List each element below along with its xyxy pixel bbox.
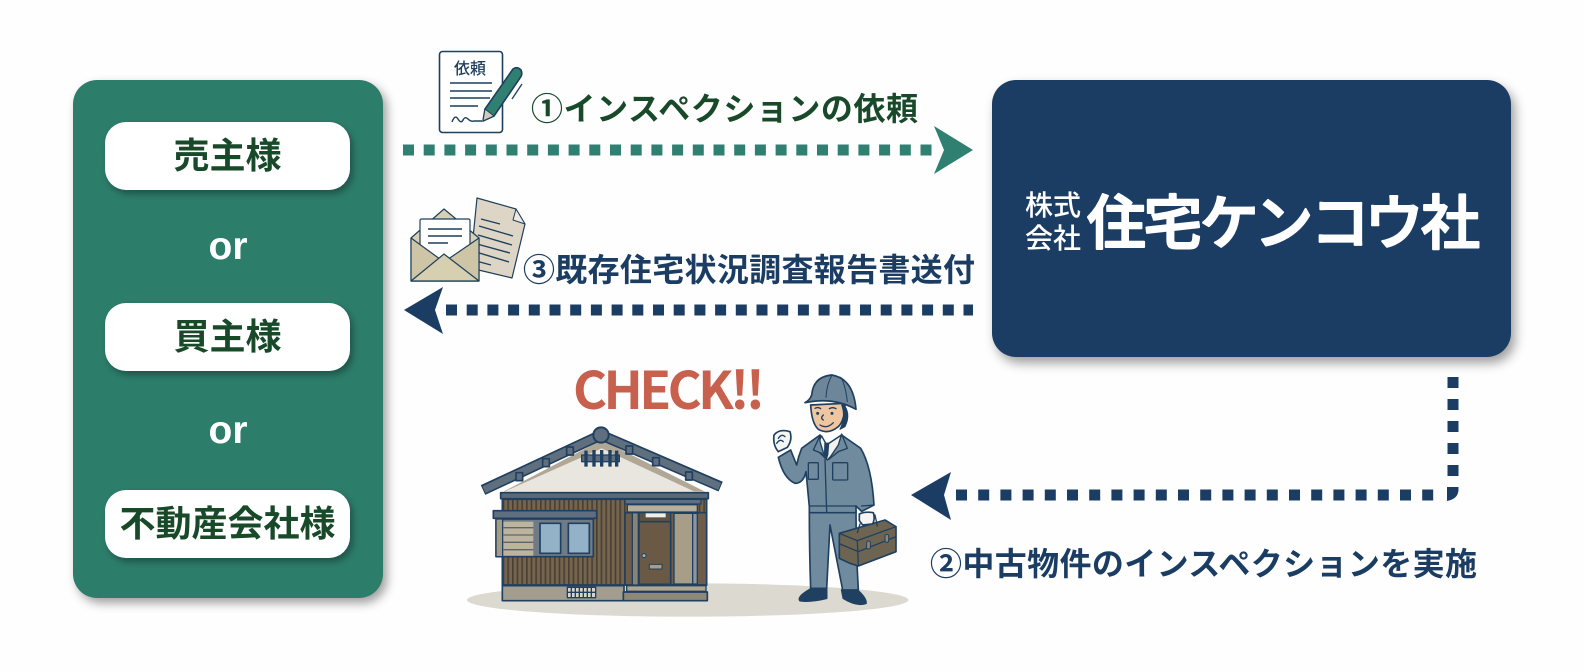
client: seller: 売主様 xyxy=(173,135,282,176)
jacket xyxy=(778,435,874,513)
icon: envelope and report xyxy=(411,198,525,281)
icon: request document and pen: 依頼 xyxy=(454,60,486,78)
house xyxy=(483,427,721,601)
neck and face xyxy=(811,403,845,432)
label 3: ③既存住宅状況調査報告書送付 xyxy=(523,252,975,288)
logo: corporate type: 会社 xyxy=(1025,223,1081,254)
trousers xyxy=(809,510,858,590)
client: buyer xyxy=(105,303,350,371)
company logo xyxy=(1025,190,1480,257)
client: seller xyxy=(105,122,350,190)
client: real estate company: 不動産会社様 xyxy=(119,503,336,544)
raised hand xyxy=(774,431,791,452)
hard hat xyxy=(805,375,856,409)
icon: request document and pen xyxy=(440,52,522,132)
label 2: ②中古物件のインスペクションを実施 xyxy=(930,546,1477,582)
inspector xyxy=(774,375,896,604)
inspection illustration xyxy=(467,375,908,617)
boots xyxy=(799,588,827,601)
or separator 1: or xyxy=(208,225,248,268)
logo: corporate type xyxy=(1025,190,1081,254)
or separator 2: or xyxy=(208,409,248,452)
logo: company name: 住宅ケンコウ社 xyxy=(1087,191,1480,257)
logo: corporate type: 株式 xyxy=(1025,190,1081,221)
panel: clients xyxy=(73,80,383,598)
arrow 2: inspection xyxy=(911,377,1458,520)
check heading: CHECK!! xyxy=(573,349,765,424)
panel: company xyxy=(992,80,1511,357)
arrow 1: request xyxy=(403,126,973,174)
label 1: ①インスペクションの依頼 xyxy=(531,91,918,127)
client: buyer: 買主様 xyxy=(173,316,282,357)
toolbox and hand xyxy=(839,520,896,566)
client: real estate company xyxy=(105,490,350,558)
ground shadow xyxy=(467,583,908,617)
arrow 3: report xyxy=(404,287,973,334)
